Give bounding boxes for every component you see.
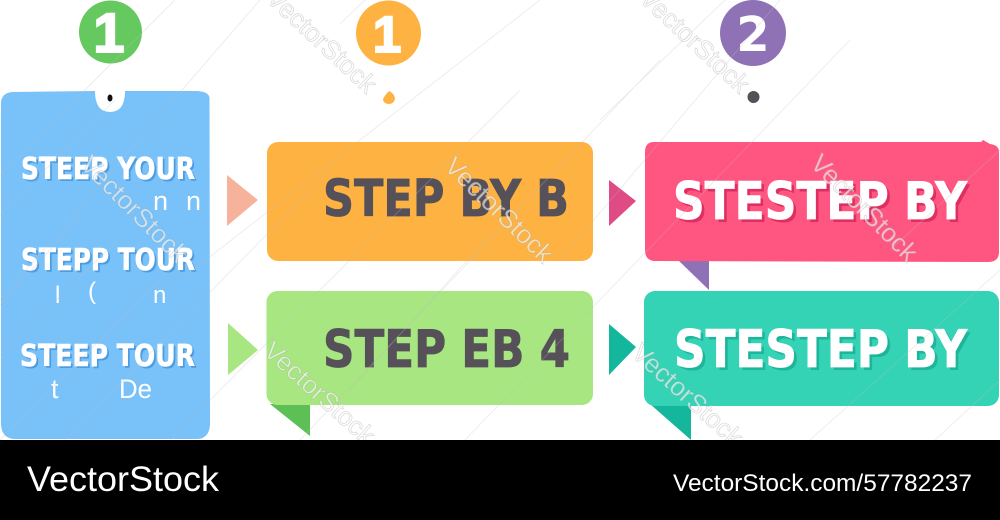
badge: orange number 1	[356, 0, 421, 66]
heading: steep tour: STEEP TOUR	[20, 339, 195, 374]
icon: orange drop	[383, 91, 395, 104]
arrow: salmon	[227, 175, 258, 226]
heading: stepp tour: STEPP TOUR	[21, 243, 195, 278]
footer bar	[0, 440, 1000, 520]
label: step by b: STEP BY B	[323, 170, 569, 229]
badge: orange number 1: 1	[373, 6, 401, 63]
footer logo: VectorStock	[27, 460, 220, 499]
arrow: light green	[228, 323, 258, 375]
text fragment: l ( n: l	[55, 282, 60, 309]
watermark text: VectorStock	[805, 148, 925, 268]
label: step eb 4: STEP EB 4	[323, 320, 570, 380]
text fragment: n n: n	[153, 186, 168, 216]
text fragment: l ( n	[55, 278, 166, 309]
text fragment: l ( n: (	[88, 278, 96, 305]
panel: orange step	[267, 142, 593, 261]
badge: green number 1: 1	[93, 1, 125, 64]
text fragment: t De: t	[51, 374, 59, 404]
watermark text	[75, 0, 925, 453]
badge: purple number 2	[720, 0, 786, 66]
panel: green step	[266, 291, 593, 405]
watermark text: VectorStock	[626, 337, 750, 453]
icon: black dot	[108, 94, 112, 102]
text fragment: n n: n	[186, 186, 201, 216]
text fragment: t De: De	[119, 374, 152, 404]
badge: green number 1	[79, 0, 142, 64]
watermark text: VectorStock	[258, 335, 382, 451]
watermark text: VectorStock	[439, 151, 560, 269]
panel: pink step	[645, 140, 999, 262]
heading: steep your: STEEP YOUR	[21, 152, 195, 187]
text fragment: l ( n: n	[153, 282, 166, 309]
panel: teal step	[644, 291, 999, 406]
text fragment: t De	[51, 374, 152, 404]
arrow: dark pink	[609, 180, 636, 226]
heading: steep tour: STEEP TOUR	[22, 341, 197, 376]
fold: teal	[650, 404, 691, 440]
watermark text: VectorStock	[75, 149, 195, 269]
icon: grey dot	[748, 91, 760, 103]
heading: steep your: STEEP YOUR	[23, 154, 197, 189]
arrow: dark teal	[609, 324, 636, 375]
badge: purple number 2: 2	[736, 7, 770, 63]
text fragment: n n	[153, 186, 201, 216]
fold: green	[270, 404, 310, 436]
footer url: VectorStock.com/57782237	[673, 470, 972, 497]
heading: stepp tour: STEPP TOUR	[23, 245, 197, 280]
fold: purple	[678, 260, 709, 290]
panel: blue step list	[1, 91, 210, 439]
